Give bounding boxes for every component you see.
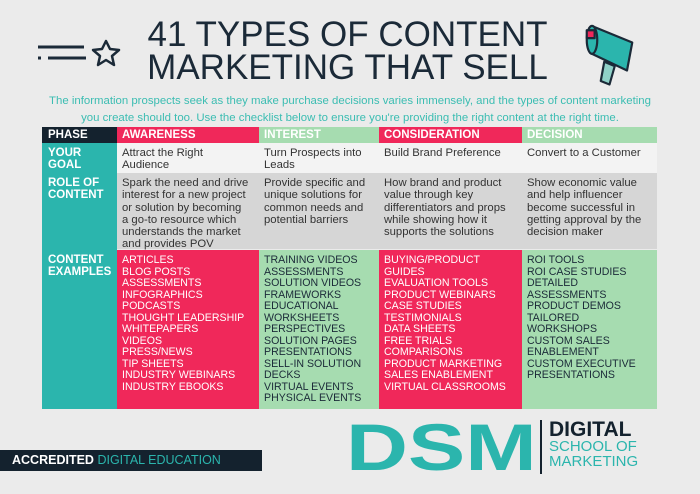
table: EXAMPLES [48,266,111,278]
table: become successful in [527,202,635,214]
accredited banner: ACCREDITED DIGITAL EDUCATION [12,453,221,467]
table: VIRTUAL CLASSROOMS [384,380,506,392]
table: Provide specific and [264,177,365,189]
logo text: SCHOOL OF [549,438,637,455]
content examples row: INDUSTRY WEBINARS [122,369,235,381]
table: COMPARISONS [384,346,463,358]
table: PRODUCT WEBINARS [384,288,496,300]
content examples row: PODCASTS [122,300,180,312]
table: CONSIDERATION [384,129,480,141]
table: PHASE [48,129,88,141]
title: 41 TYPES OF CONTENT [148,15,548,54]
table: PRESENTATIONS [264,346,352,358]
subtitle [49,95,651,124]
table: getting approval by the [527,214,641,226]
table: and provides POV [122,238,214,250]
table: decision maker [527,226,603,238]
table: DATA SHEETS [384,323,455,335]
table: WORKSHOPS [527,323,597,335]
table: SOLUTION PAGES [264,334,357,346]
table: SOLUTION VIDEOS [264,277,361,289]
content examples row: VIDEOS [122,334,162,346]
title [147,15,548,87]
table: unique solutions for [264,189,362,201]
table: Show economic value [527,177,637,189]
content examples row: PRESS/NEWS [122,346,193,358]
table: BUYING/PRODUCT [384,254,480,266]
table: WORKSHEETS [264,312,339,324]
table: CUSTOM SALES [527,334,610,346]
table: or solution by becoming [122,202,241,214]
table: SELL-IN SOLUTION [264,358,361,370]
table: EVALUATION TOOLS [384,277,488,289]
table [42,127,657,409]
content examples row: BLOG POSTS [122,266,190,278]
logo: DSM: DSM [346,410,537,484]
table: PRODUCT DEMOS [527,300,621,312]
table: DECISION [527,129,583,141]
table: VIRTUAL EVENTS [264,380,353,392]
table: YOUR [48,147,81,159]
table: Attract the Right [122,147,203,159]
table: value through key [384,189,473,201]
table: Leads [264,159,295,171]
table: TESTIMONIALS [384,312,462,324]
table: interest for a new project [122,189,246,201]
row labels column [42,127,117,409]
table: understands the market [122,226,241,238]
table: common needs and [264,202,363,214]
table: PRESENTATIONS [527,369,615,381]
table: ROI CASE STUDIES [527,266,626,278]
table: PHYSICAL EVENTS [264,392,361,404]
content examples row: INDUSTRY EBOOKS [122,380,223,392]
table: How brand and product [384,177,501,189]
goal row [117,143,657,173]
table: Spark the need and drive [122,177,248,189]
table: potential barriers [264,214,348,226]
content examples row: ARTICLES [122,254,174,266]
role row [117,173,657,249]
table: Audience [122,159,169,171]
subtitle: you create should too. Use the checklist below to ensure you're providing the right content at the right time. [81,112,619,124]
table: ASSESSMENTS [527,288,606,300]
icon: megaphone [586,24,634,86]
content examples row: ASSESSMENTS [122,277,201,289]
table: INTEREST [264,129,321,141]
table: Turn Prospects into [264,147,362,159]
table: CONTENT [48,189,104,201]
table: ASSESSMENTS [264,266,343,278]
header row [117,127,259,143]
table: PRODUCT MARKETING [384,358,502,370]
table: differentiators and props [384,202,506,214]
table: DETAILED [527,277,578,289]
content examples row [117,250,259,409]
table: FRAMEWORKS [264,288,341,300]
logo text: MARKETING [549,453,638,470]
table: ENABLEMENT [527,346,599,358]
content examples row: THOUGHT LEADERSHIP [122,312,244,324]
table: SALES ENABLEMENT [384,369,493,381]
header row: AWARENESS [122,129,196,141]
table: ROLE OF [48,177,99,189]
table: PERSPECTIVES [264,323,345,335]
table: a go-to resource which [122,214,236,226]
table: FREE TRIALS [384,334,452,346]
accredited banner [0,450,262,471]
icon: star with speed lines [38,40,120,66]
table: TRAINING VIDEOS [264,254,358,266]
table: DECKS [264,369,300,381]
table: CONTENT [48,254,104,266]
table: ROI TOOLS [527,254,584,266]
logo text: DIGITAL [549,418,631,441]
table: GOAL [48,159,81,171]
table: EDUCATIONAL [264,300,339,312]
content examples row: WHITEPAPERS [122,323,198,335]
content examples row: TIP SHEETS [122,358,184,370]
table: while showing how it [384,214,487,226]
table: Convert to a Customer [527,147,641,159]
table: and help influencer [527,189,622,201]
table: CUSTOM EXECUTIVE [527,358,636,370]
table: supports the solutions [384,226,494,238]
subtitle: The information prospects seek as they make purchase decisions varies immensely, and the types of content marketing [49,95,651,107]
table: TAILORED [527,312,579,324]
table: GUIDES [384,266,425,278]
title: MARKETING THAT SELL [147,48,548,87]
content examples row: INFOGRAPHICS [122,288,203,300]
table: Build Brand Preference [384,147,501,159]
logo text [540,420,670,474]
table: CASE STUDIES [384,300,462,312]
